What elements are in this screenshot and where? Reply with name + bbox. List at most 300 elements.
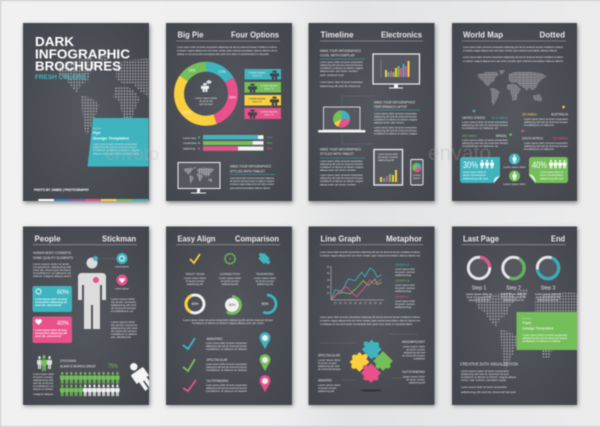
text block 1 (320, 49, 365, 88)
watermark: envato (428, 142, 491, 165)
intro text: et dolore magna aliqua enim ad minim veniam quis nostrud exercitation ullamco laboris (463, 59, 564, 63)
donut labels: 17% (218, 70, 226, 74)
intro text: et dolore magna aliqua enim ad minim veniam quis nostrud exercitation ullamco laboris (463, 48, 558, 52)
card: people (23, 226, 155, 406)
location: South Africa: SOUTH AFRICA (522, 136, 544, 140)
label outstanding (402, 370, 426, 384)
label spectacular: SPECTACULAR (318, 354, 341, 358)
intro text (320, 250, 420, 258)
40% callout: Lorem ipsum dolor sit (540, 170, 563, 174)
laptop (318, 107, 366, 132)
cover title: DARK (35, 35, 74, 49)
right text: do eiusmod tempor (111, 306, 136, 310)
chart legend: adipiscing (395, 305, 412, 309)
label magnificent: sit amet consec (406, 348, 426, 352)
progress bars: consectetur (183, 141, 197, 145)
progress bars: Lorem ipsu (183, 136, 197, 140)
monitor icon (178, 162, 220, 194)
line chart: 07 (364, 302, 367, 305)
large white person (129, 362, 150, 392)
location: Australia: 25 million (522, 112, 537, 116)
right text: incididunt ut labore (111, 332, 138, 336)
comparison text: Lorem ipsum dolor sit amet consectetur (206, 383, 247, 387)
text block 1: Lorem ipsum dolor sit amet consectetur (320, 80, 363, 84)
right text: Lorem ipsum dolor (111, 297, 135, 301)
teal text box: aliqua enim ad minim veniam quis (93, 152, 140, 156)
closing text: adipiscing elit sed do eiusmod tempor (461, 390, 516, 394)
left group text (33, 372, 54, 396)
comparison text: SPECTACULAR (206, 358, 228, 362)
label outstanding: sit amet consec (406, 378, 426, 382)
label spectacular: Lorem ipsum dolor (318, 358, 340, 362)
chart legend: GRAPH C (395, 295, 410, 299)
text block 3: incididunt ut labore et dolore magna (320, 165, 364, 169)
card: cover (21, 22, 153, 206)
location: Brazil (462, 133, 512, 148)
donut labels: 40% (183, 110, 191, 114)
label magnificent: do eiusmod tempor (402, 354, 425, 358)
text block 1: COOL WITH DISPLAY (320, 54, 356, 58)
location: Brazil: Lorem ipsum dolor sit amet consectetur (462, 138, 508, 142)
top captions: adipiscing elit (187, 282, 203, 286)
text block 3: adipiscing elit sed do eiusmod tempor (320, 162, 363, 166)
green box (516, 312, 577, 350)
location: United States: adipiscing elit sed do eiusmod tempor (462, 123, 508, 127)
step text: Lorem ipsum dolor sit (535, 292, 561, 296)
monitor text (230, 164, 275, 190)
green box: Flyer (522, 320, 532, 325)
green box: Design Templates (522, 326, 554, 330)
chart legend: sit amet consec (395, 286, 416, 290)
intro text (463, 45, 564, 63)
card: last page (452, 226, 600, 406)
monitor text: quis nostrud exercitation ullamco laboris (230, 186, 271, 190)
green box: Business (522, 318, 532, 320)
card: big pie (166, 23, 293, 203)
step text: Lorem ipsum dolor sit (501, 292, 527, 296)
mid text: Lorem ipsum dolor sit amet consectetur adipiscing elit sed do eiusmod tempor incididunt ut labore (320, 315, 420, 319)
text block 1: incididunt ut labore et dolore magna (320, 66, 364, 70)
progress bars: adipiscing (183, 146, 195, 150)
group icon (37, 355, 52, 371)
30% callout: adipiscing elit sed (463, 176, 489, 180)
location: United States: Lorem ipsum dolor sit amet consectetur (462, 120, 508, 124)
heading (320, 30, 423, 41)
ring charts: 60% (262, 302, 268, 306)
card: easy align (166, 226, 293, 406)
line chart: 03 (344, 302, 347, 305)
teal 60% box: consectetur adipiscing elit (35, 300, 67, 304)
cover world map (56, 55, 149, 135)
green box: incididunt ut labore et dolore (522, 339, 561, 343)
chart legend: adipiscing (395, 273, 412, 277)
location: Australia: adipiscing elit sed do eiusmod tempor (524, 120, 568, 124)
label outstanding: Lorem ipsum dolor (403, 374, 425, 378)
pictogram grid (60, 372, 120, 396)
chart legend (395, 263, 416, 309)
body text: incididunt ut labore et (33, 271, 71, 275)
label magnificent (402, 340, 426, 360)
line chart: 05 (354, 302, 357, 305)
puzzle (346, 335, 395, 392)
text block 2: adipiscing elit sed do eiusmod tempor (374, 128, 417, 132)
top captions: sit amet consec (256, 279, 275, 283)
comparison text: AMAZING (206, 337, 223, 341)
text block 2: Lorem ipsum dolor sit amet consectetur (374, 112, 417, 116)
option tags: dolor sit (264, 112, 274, 116)
text block 1: aliqua enim ad minim veniam (320, 69, 359, 73)
left group text: sit amet consec (33, 375, 54, 379)
teal text box: Design Templates (93, 136, 130, 140)
label spectacular (318, 354, 341, 371)
text block 2: Lorem ipsum dolor sit amet consectetur (374, 126, 417, 130)
heading: Stickman (102, 234, 136, 244)
option tags: dolor sit (264, 86, 274, 90)
right text: Lorem ipsum dolor (111, 320, 135, 324)
heading: Four Options (231, 30, 279, 40)
heading (462, 234, 566, 245)
mid text: et dolore magna aliqua enim ad minim veniam quis nostrud exercitation ullamco laboris nisi (320, 318, 420, 322)
location: United States: 10.4 million (491, 116, 508, 120)
step labels (472, 286, 555, 292)
label amazing: AMAZING (318, 378, 332, 382)
teal 60% box (32, 286, 72, 312)
30% callout: amet consectetur (463, 173, 486, 177)
chart legend: GRAPH A (395, 263, 410, 267)
top captions: sit amet consec (186, 279, 205, 283)
location: Australia (522, 106, 569, 127)
phone: ipsum (413, 176, 421, 180)
step text: adipiscing sed do (469, 298, 490, 302)
chart legend: adipiscing (395, 289, 412, 293)
line chart: 02 (339, 302, 342, 305)
30% callout: Lorem ipsum dolor sit (463, 170, 486, 174)
heading: Dotted (540, 30, 565, 40)
heading (320, 234, 423, 245)
heading: Comparison (235, 234, 279, 244)
donut center icon: Lorem ipsum dolor (195, 96, 217, 100)
monitor text: STYLED WITH TABLET (230, 170, 265, 174)
checks (183, 338, 196, 391)
mid text (320, 315, 420, 326)
label magnificent: MAGNIFICENT (402, 340, 425, 344)
text block 3: MAKE YOUR INFOGRAPHICS (320, 148, 361, 152)
step text: Lorem ipsum dolor sit (466, 292, 492, 296)
text block 3: adipiscing elit sed do eiusmod tempor (320, 176, 363, 180)
right text: do eiusmod tempor (111, 329, 137, 333)
location: Australia: Lorem ipsum dolor sit amet consectetur (524, 117, 568, 121)
option tags: Lorem ipsum (261, 84, 278, 88)
center icons: Lorem ipsum dolor (503, 182, 526, 186)
label amazing (318, 378, 340, 393)
top captions: adipiscing elit (222, 282, 238, 286)
label amazing: Lorem ipsum dolor (318, 383, 340, 387)
line chart: 10 (379, 302, 382, 305)
right text: adipiscing elit sed (111, 303, 137, 307)
label outstanding: OUTSTANDING (402, 370, 426, 374)
option tags: Lorem ipsum (249, 70, 266, 74)
left group text: magna aliqua (33, 392, 54, 396)
top captions: adipiscing elit (257, 282, 273, 286)
step text: adipiscing sed do (538, 298, 559, 302)
heading: Electronics (381, 30, 422, 40)
location: United States: UNITED STATES (462, 116, 485, 120)
pink 40% box: consectetur adipiscing elit (35, 331, 67, 335)
location: South Africa: Lorem ipsum dolor sit amet consectetur (524, 141, 568, 145)
text block 2: adipiscing elit sed do eiusmod tempor (374, 114, 417, 118)
body text: sed do eiusmod tempor (33, 268, 71, 272)
heading: Metaphor (386, 234, 423, 244)
location: South Africa (521, 130, 568, 151)
center icons: Lorem ipsum dolor (503, 165, 526, 169)
right text: sit amet consect (111, 323, 137, 327)
closing text: Lorem ipsum dolor sit amet consectetur (461, 385, 507, 389)
top captions: Lorem ipsum dolor (254, 276, 276, 280)
chart legend: sit amet consec (395, 270, 416, 274)
heading: Big Pie (178, 30, 204, 40)
line chart: 30 (327, 279, 330, 282)
right text: adipiscing elit sed (111, 326, 138, 330)
body text (33, 251, 73, 278)
closing text: CREATIVE DATA VISUALIZATION (460, 362, 518, 366)
step text: amet consectetur elit (536, 295, 561, 299)
step labels: Step 1 (472, 286, 486, 292)
line chart: 04 (349, 302, 352, 305)
heading: World Map (463, 30, 503, 40)
progress bars: 55% (267, 146, 273, 150)
body text: dolore magna aliqua enim (33, 274, 72, 278)
heading (176, 30, 280, 41)
right text (111, 297, 138, 339)
heading: Last Page (463, 234, 499, 244)
label spectacular: do eiusmod tempor (318, 367, 341, 371)
top captions: Lorem ipsum dolor (184, 276, 206, 280)
top captions: CONNECTION (220, 272, 240, 276)
color bar (38, 199, 148, 201)
intro text: Lorem ipsum dolor sit amet consectetur adipiscing elit sed do eiusmod tempor incididunt ut labore (177, 45, 277, 49)
donut center icon: sed tempor (199, 102, 213, 106)
closing text: adipiscing elit sed do eiusmod tempor (461, 372, 509, 376)
text block 2: PERFORMANCE LAPTOP (374, 105, 407, 109)
cover title (35, 35, 130, 74)
donut labels: 28% (229, 96, 237, 100)
connectors (320, 334, 418, 380)
teal 60% box: sed do eiusmod (35, 303, 61, 307)
comparison text: Lorem ipsum dolor sit amet consectetur (206, 362, 247, 366)
cover title: INFOGRAPHIC (35, 48, 130, 62)
line chart: 09 (374, 302, 377, 305)
body text: HUMAN BODY CONSISTS (33, 251, 71, 255)
text block 3: Lorem ipsum dolor sit amet consectetur (320, 173, 363, 177)
intro text: Lorem ipsum dolor sit amet consectetur adipiscing elit sed do eiusmod tempor incididunt ut labore (320, 250, 420, 254)
pink 40% box: Lorem ipsum dolor sit amet (35, 328, 67, 332)
label magnificent: Lorem ipsum dolor (403, 344, 425, 348)
heading: Timeline (320, 30, 354, 40)
monitor chart (373, 54, 420, 88)
ring charts: 60% (192, 302, 198, 306)
location: Brazil: adipiscing elit sed do eiusmod tempor (462, 141, 508, 145)
option tags: Lorem ipsum (249, 96, 266, 100)
intro text: et dolore magna aliqua enim ad minim veniam quis nostrud exercitation ullamco laboris nisi (320, 254, 420, 258)
body text: SOME QUALITY ELEMENTS (33, 256, 73, 260)
caption: incididunt ut labore et dolore magna aliqua enim ad minim (192, 321, 265, 325)
group text: ALWAYS WORKS GREAT (60, 364, 96, 368)
comparison text (206, 337, 248, 393)
comparison text: incididunt ut labore et dolore (206, 347, 248, 351)
line chart: 40 (327, 272, 330, 275)
cover title: BROCHURES (35, 60, 121, 74)
40% callout: 40% (532, 160, 547, 170)
line chart: 20 (327, 286, 330, 289)
left group text: Lorem ipsum dolor (33, 372, 54, 376)
teal text box (88, 118, 148, 166)
30% callout (460, 157, 500, 183)
step text: adipiscing sed do (503, 298, 524, 302)
location: South Africa: incididunt ut labore (524, 147, 555, 151)
donut center icon (195, 80, 217, 106)
step labels: Step 3 (541, 286, 555, 292)
pink 40% box: 40% (57, 321, 70, 327)
teal text box: incididunt ut labore et dolore magna (93, 148, 140, 152)
card: world map (452, 23, 578, 203)
left group text: incididunt ut (33, 384, 53, 388)
location: United States (462, 110, 508, 130)
card: line graph (308, 226, 436, 406)
chart legend: Lorem ipsum dolor (395, 299, 415, 303)
closing text (460, 362, 518, 394)
top captions: TEAMWORK (256, 272, 274, 276)
step text: amet consectetur elit (501, 295, 526, 299)
progress bars: 92% (267, 136, 273, 140)
donut chart (179, 67, 233, 121)
map pins (260, 332, 270, 392)
comparison text: adipiscing elit sed do eiusmod tempor (206, 344, 247, 348)
body text: consectetur adipiscing elit (33, 265, 71, 269)
teal 60% box: Lorem ipsum dolor sit amet (35, 297, 67, 301)
option tags: Lorem ipsum (261, 110, 278, 114)
monitor text: Lorem ipsum dolor sit amet consectetur adipiscing (230, 176, 274, 180)
group text (60, 359, 119, 370)
location: South Africa: 55 million (553, 136, 568, 140)
world map (475, 289, 578, 369)
caption (183, 318, 273, 325)
heading (462, 30, 566, 41)
right text: sit amet consect (111, 300, 136, 304)
text block 1: MAKE YOUR INFOGRAPHICS (320, 49, 361, 53)
monitor text: elit sed do eiusmod tempor incididunt ut labore (230, 179, 274, 183)
40% callout (529, 157, 568, 183)
text block 3: Lorem ipsum dolor sit amet consectetur (320, 159, 363, 163)
text block 1: Lorem ipsum dolor sit amet consectetur (320, 60, 363, 64)
text block 1: quis nostrud exer (320, 73, 344, 77)
card: timeline (308, 23, 436, 203)
ring charts (183, 292, 276, 316)
closing text: Lorem ipsum dolor sit amet consectetur (461, 369, 509, 373)
label amazing: sit amet consec (318, 386, 337, 390)
text block 3: aliqua enim ad minim veniam (320, 182, 357, 186)
location: United States: incididunt ut labore et (462, 126, 498, 130)
line chart: 01 (334, 302, 337, 305)
line chart: 50 (327, 266, 330, 269)
stick figure (78, 256, 106, 329)
heading: Easy Align (178, 234, 216, 244)
text block 1: adipiscing elit sed do eiusmod (320, 84, 361, 88)
teal text box: Business (93, 128, 103, 130)
label magnificent: adipiscing elit sed (404, 350, 426, 354)
right text: incididunt ut (111, 309, 133, 313)
label outstanding: adipiscing elit (409, 380, 425, 384)
top captions: sit amet consec (221, 279, 240, 283)
label magnificent: incididunt (414, 356, 425, 360)
heading (33, 234, 137, 245)
cover footer: PHOTO BY JAMES | PHOTOGRAPHY (34, 188, 90, 192)
heading (176, 234, 280, 245)
organ icons: Lorem ipsum (115, 288, 129, 290)
phone (411, 160, 423, 185)
step text (466, 292, 561, 302)
left group text: labore et dolore (33, 387, 54, 391)
comparison text: incididunt ut labore et dolore (206, 389, 248, 393)
organ icons: Lorem ipsum (115, 266, 129, 268)
center icons (503, 154, 526, 186)
step labels: Step 2 (506, 286, 521, 292)
option tags: dolor sit (252, 100, 262, 104)
intro text: et dolore magna aliqua enim ad minim veniam quis nostrud exercitation ullamco laboris nisi ut (177, 48, 277, 52)
option tags: dolor sit (252, 74, 262, 78)
option tags (244, 69, 281, 119)
tablet (374, 150, 402, 185)
subtitle: FRESH COLORS (35, 74, 86, 81)
text block 3: incididunt ut labore et dolore magna (320, 179, 364, 183)
closing text: incididunt ut labore et dolore magna aliqua (461, 375, 517, 379)
comparison text: adipiscing elit sed do eiusmod tempor (206, 365, 247, 369)
step text: amet consectetur elit (467, 295, 492, 299)
green box: Lorem ipsum dolor sit amet consectetur (522, 333, 568, 337)
top captions: Lorem ipsum dolor (219, 276, 241, 280)
watermark: envato (105, 144, 159, 164)
tablet: adipiscing elit (378, 158, 394, 162)
donut labels: 15% (188, 68, 196, 72)
body text: Lorem ipsum dolor sit amet (33, 262, 69, 266)
top captions (184, 272, 276, 286)
text block 2: incididunt ut labore et dolore magna (374, 132, 418, 136)
label spectacular: sit amet consec (318, 361, 337, 365)
monitor text: et dolore magna aliqua enim ad minim veniam (230, 182, 275, 186)
text block 2: incididunt ut labore et dolore magna (374, 118, 418, 122)
intro text: aliquip ex ea commodo consequat duis aute irure dolor in reprehenderit in voluptate (177, 52, 269, 56)
chart legend: sit amet consec (395, 302, 416, 306)
intro text: Lorem ipsum dolor sit amet consectetur adipiscing elit sed do eiusmod tempor incididunt ut labore (463, 45, 563, 49)
line chart (327, 266, 384, 305)
text block 2 (374, 100, 420, 136)
text block 3: STYLED WITH TABLET (320, 152, 354, 156)
pink 40% box: sed do eiusmod (35, 334, 61, 338)
teal text box: adipiscing elit sed do eiusmod tempor (93, 145, 137, 149)
text block 1: adipiscing elit sed do eiusmod tempor (320, 63, 363, 67)
left group text: sed do eiusmod (33, 381, 54, 385)
40% callout: adipiscing elit sed (540, 176, 564, 180)
green box: adipiscing elit sed do eiusmod tempor (522, 336, 568, 340)
intro text (177, 45, 277, 56)
group text: 75% (108, 364, 119, 370)
phone: Lorem (413, 173, 421, 177)
donut labels (183, 68, 237, 114)
right text: et dolore (111, 335, 132, 339)
location: Brazil: 890 million (462, 134, 477, 138)
caption: Lorem ipsum dolor sit amet consectetur adipiscing elit sed do eiusmod tempor (183, 318, 273, 322)
line chart: 10 (327, 292, 330, 295)
chart legend: Lorem ipsum dolor (395, 283, 415, 287)
